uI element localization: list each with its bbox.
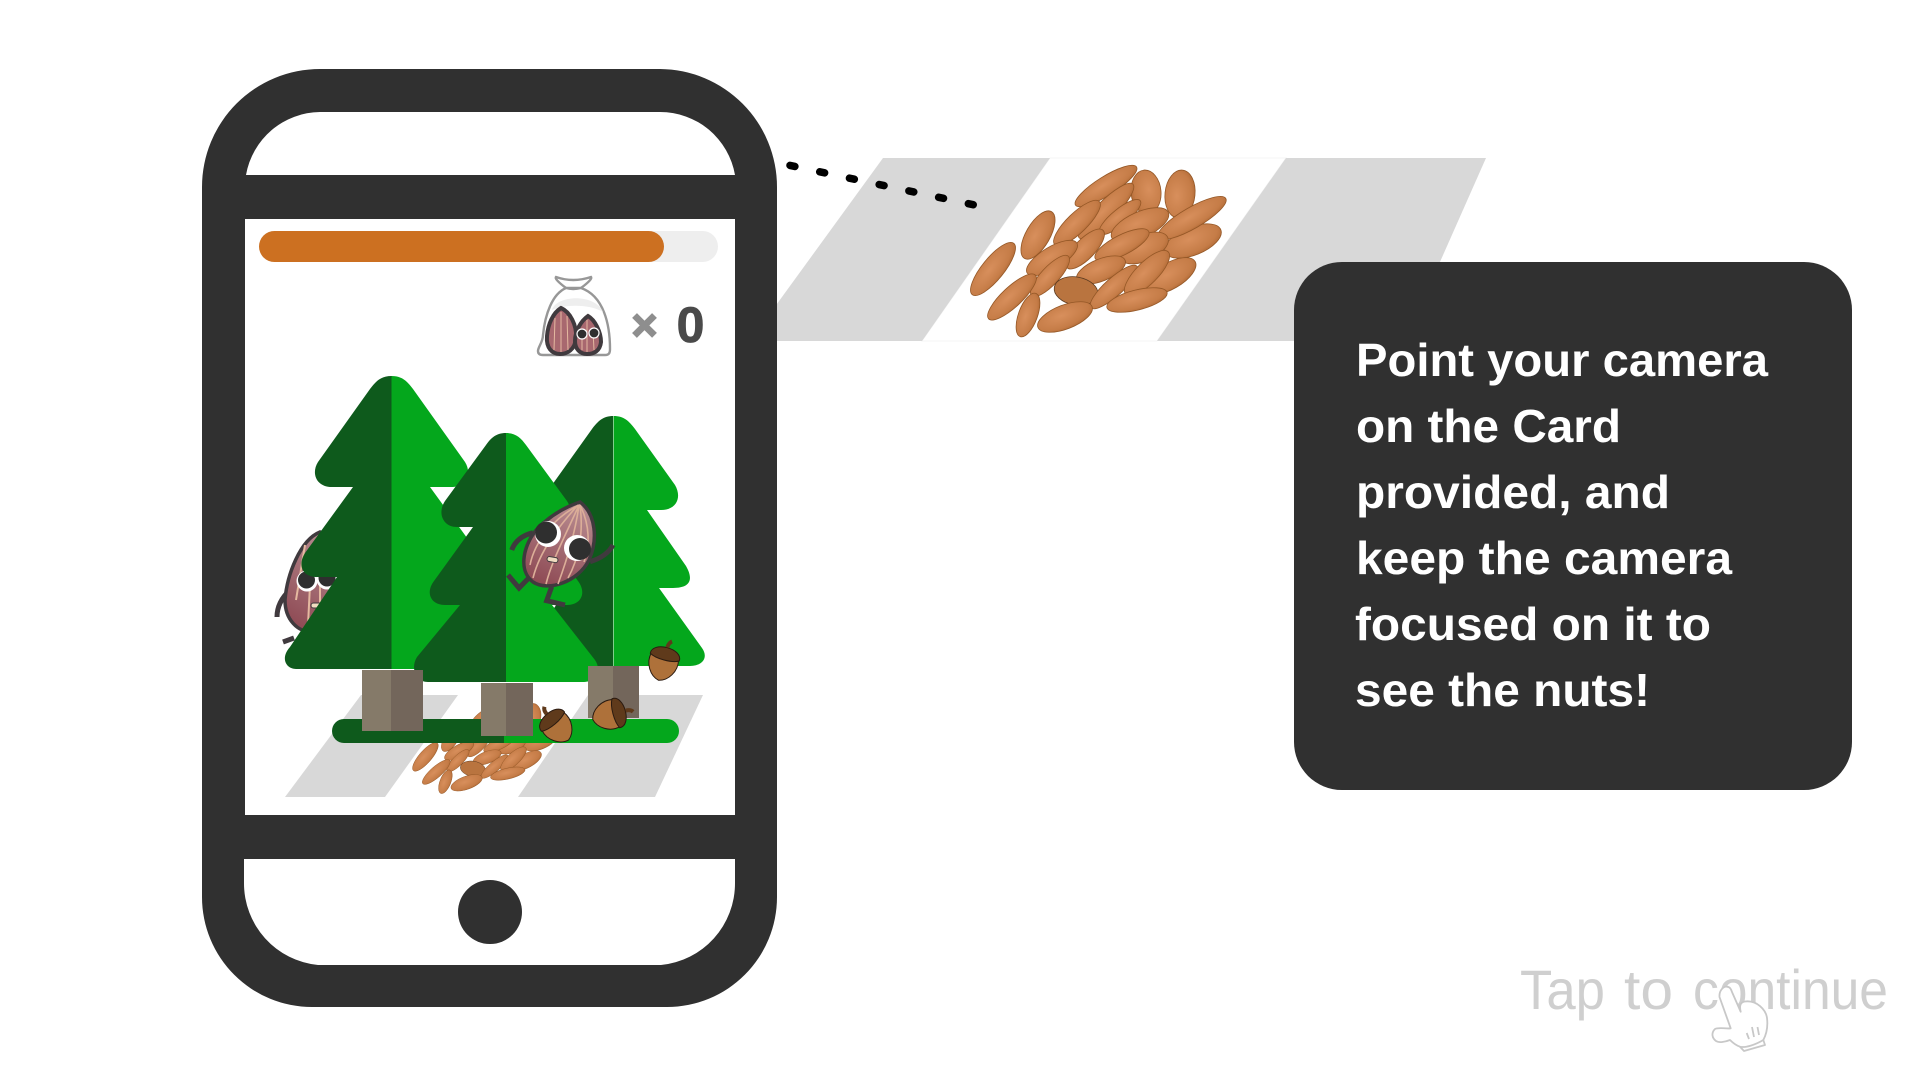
instruction text: provided, and [1356,466,1670,518]
small tracking card in scene [285,695,703,797]
almond character hiding behind tree [277,532,345,642]
tap to continue prompt: Tap [1520,958,1605,1021]
dotted connector line [790,165,976,205]
tap to continue prompt: continue [1693,958,1888,1021]
small almond pile in scene [409,697,562,795]
progress bar [259,231,718,262]
almond pile on card [964,159,1231,340]
instruction text: keep the camera [1356,532,1732,584]
tracking card [750,158,1486,341]
icon: tapping hand [1712,987,1767,1051]
acorn centre [531,699,580,750]
phone home button [458,880,522,944]
instruction text: see the nuts! [1355,664,1650,716]
acorn on trunk [589,694,636,734]
tap to continue prompt: to [1624,958,1673,1021]
left tree [285,376,498,669]
tree trunks [362,666,639,736]
instruction text: focused on it to [1355,598,1711,650]
acorn right [644,637,684,684]
phone frame [202,69,777,1007]
icon: bag with almonds [538,277,610,355]
panel: instruction callout [1294,262,1852,790]
nut count: 0 [677,297,704,353]
phone screen content [259,231,718,797]
right tree [522,416,705,666]
ground bar [332,719,679,743]
instruction text: Point your camera [1356,334,1768,386]
instruction text [1355,334,1768,716]
instruction text: on the Card [1356,400,1621,452]
tap to continue prompt [1520,958,1888,1021]
almond character running [508,502,613,605]
multiply sign: × [632,301,657,350]
middle tree [414,433,598,682]
